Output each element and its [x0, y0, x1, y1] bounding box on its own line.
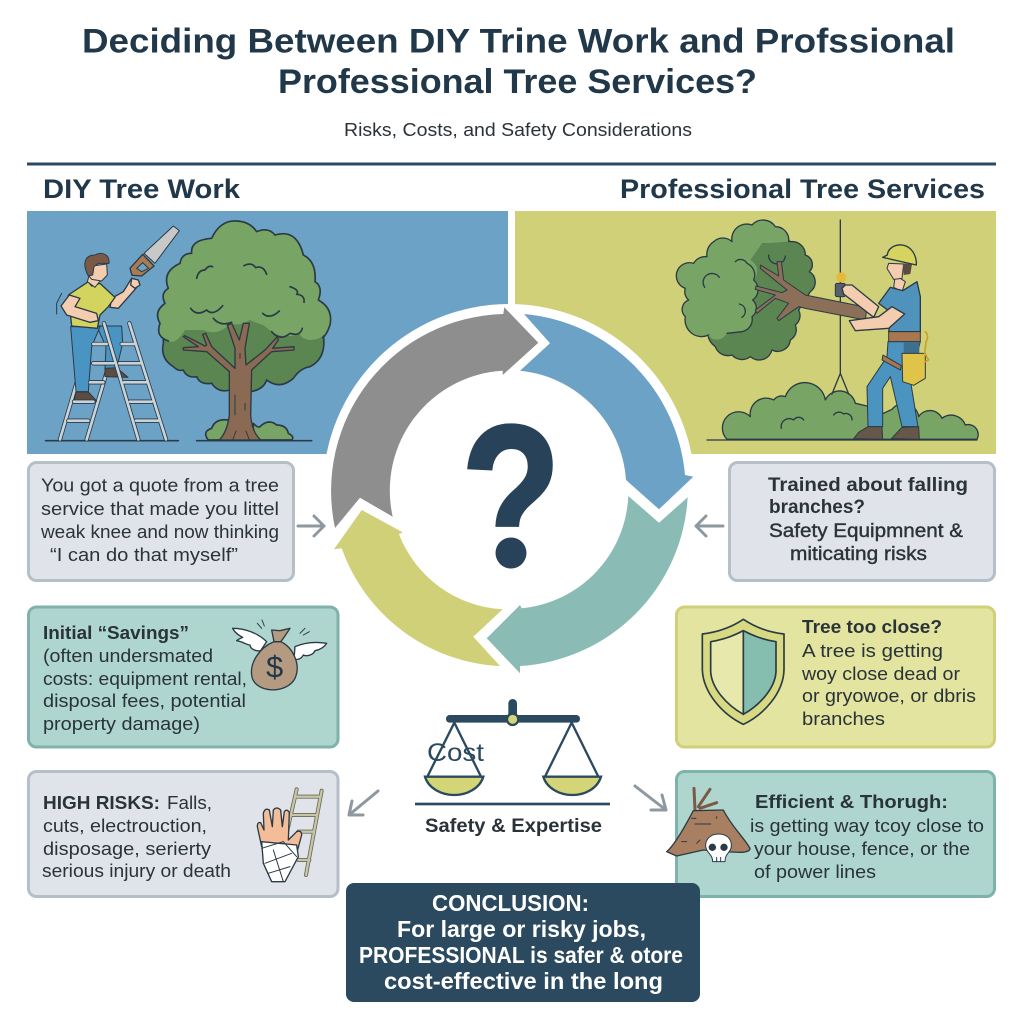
conclusion text: PROFESSIONAL is safer & otore	[359, 942, 683, 968]
card text	[42, 792, 231, 881]
card text: “I can do that myself”	[50, 544, 238, 565]
illustration: professional worker cutting branch	[676, 220, 978, 440]
card text: or gryowoe, or dbris	[802, 685, 976, 706]
card text	[768, 475, 968, 565]
man	[57, 253, 140, 401]
scale icon: cost versus safety	[415, 699, 610, 805]
heading: DIY Tree Work: DIY Tree Work	[43, 174, 241, 204]
card text: weak knee and now thinking	[40, 521, 279, 542]
scale label: Cost: Cost	[427, 739, 484, 767]
illustration: tree in DIY panel	[158, 221, 331, 441]
card text: Efficient & Thorugh:	[755, 791, 948, 812]
panel: professional illustration background	[515, 211, 996, 454]
arrow: cycle from trained	[696, 516, 723, 536]
card text	[40, 474, 279, 565]
heading: Professional Tree Services: Professional Tree Services	[620, 174, 985, 204]
conclusion text: cost-effective in the long	[384, 968, 663, 994]
card text: cuts, electrouction,	[43, 815, 207, 836]
cut tree canopy	[676, 220, 815, 360]
card text: service that made you littel	[41, 498, 279, 519]
card text: costs: equipment rental,	[43, 668, 247, 689]
card text: branches	[802, 708, 885, 729]
icon: money bag with wings	[233, 620, 327, 690]
card text: miticating risks	[790, 544, 927, 565]
card text: disposage, serierty	[43, 838, 212, 859]
icon: money bag with wings: $	[266, 650, 283, 684]
card text: branches?	[769, 497, 865, 518]
title	[82, 22, 955, 101]
arrow: quote to cycle	[298, 516, 324, 536]
illustration: man on ladder with saw	[46, 226, 179, 441]
card text: A tree is getting	[802, 640, 943, 661]
card: high risks	[28, 772, 338, 896]
card text: Tree too close?	[802, 616, 942, 637]
shrubs and ground	[707, 383, 978, 440]
title: Deciding Between DIY Trine Work and Profssional	[82, 22, 955, 60]
card: initial savings	[28, 607, 338, 747]
card text: your house, fence, or the	[754, 838, 970, 859]
gray arrow	[331, 307, 538, 528]
card text: HIGH RISKS:	[43, 792, 160, 813]
teal arrow	[487, 496, 688, 673]
worker	[842, 245, 929, 439]
card text	[801, 616, 976, 729]
subtitle: Risks, Costs, and Safety Considerations	[344, 120, 692, 140]
cycle diagram	[323, 304, 695, 676]
scale label: Safety and Expertise: Safety & Expertise	[425, 816, 602, 837]
card text: (often undersmated	[43, 645, 213, 666]
card: efficient and thorough	[667, 772, 994, 896]
card text: of power lines	[754, 861, 876, 882]
saw	[130, 226, 179, 276]
card text: You got a quote from a tree	[41, 474, 279, 496]
card: tree too close	[676, 607, 994, 747]
icon: bandaged hand and ladder	[257, 789, 322, 882]
conclusion text	[359, 890, 683, 994]
icon: debris mound with skull	[667, 788, 750, 862]
branch	[755, 262, 867, 321]
card text: is getting way tcoy close to	[750, 815, 984, 836]
conclusion box	[346, 883, 700, 1002]
card text: property damage)	[43, 713, 200, 734]
ladder back rails	[60, 324, 107, 439]
blue arrow	[520, 314, 693, 509]
card text: serious injury or death	[42, 860, 231, 881]
ladder front rails and rungs	[68, 323, 166, 439]
card text: Falls,	[167, 792, 212, 813]
conclusion text: For large or risky jobs,	[397, 916, 646, 942]
panel: DIY illustration background	[27, 211, 508, 454]
arrow: scale to efficient	[635, 786, 666, 810]
icon: shield	[702, 619, 784, 724]
arrow: scale to high risks	[349, 791, 378, 815]
title: Professional Tree Services?	[278, 63, 757, 101]
card text	[43, 622, 247, 734]
card: trained	[730, 462, 994, 580]
card: quote	[28, 462, 294, 580]
rope and hook	[832, 220, 849, 394]
card text: disposal fees, potential	[43, 690, 246, 711]
card text: woy close dead or	[801, 663, 960, 684]
olive arrow	[334, 510, 503, 666]
conclusion text: CONCLUSION:	[432, 890, 589, 916]
card text: Initial “Savings”	[43, 622, 189, 643]
card text: Trained about falling	[768, 475, 968, 496]
question mark: ?	[461, 383, 561, 612]
card text: Safety Equipmnent &	[769, 521, 963, 542]
card text	[750, 791, 984, 882]
